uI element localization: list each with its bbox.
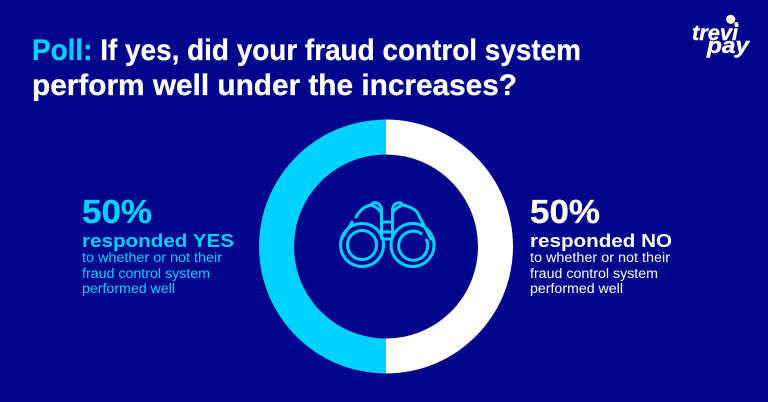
logo wordmark bbox=[692, 22, 751, 58]
logo: TreviPay bbox=[692, 15, 751, 58]
callout: 50% no: to whether or not their bbox=[530, 250, 671, 265]
callout: 50% no: performed well bbox=[530, 281, 623, 296]
title: Poll: If yes, did your fraud control system bbox=[32, 34, 581, 67]
title: perform well under the increases? bbox=[32, 69, 517, 102]
callout: 50% no bbox=[530, 193, 672, 296]
logo wordmark: pay bbox=[706, 33, 751, 58]
donut segment: YES 50% bbox=[259, 120, 386, 374]
callout: 50% yes: responded YES bbox=[82, 230, 234, 251]
logo dots bbox=[726, 15, 738, 26]
callout: 50% no: 50% bbox=[530, 193, 600, 230]
callout: 50% yes: 50% bbox=[82, 193, 152, 230]
donut segment: NO 50% bbox=[386, 120, 513, 374]
icon: binoculars bbox=[340, 203, 434, 266]
logo wordmark: trevi bbox=[692, 22, 739, 45]
callout: 50% yes: to whether or not their bbox=[82, 250, 223, 265]
callout: 50% yes: fraud control system bbox=[82, 266, 210, 281]
title bbox=[32, 34, 581, 102]
callout: 50% no: responded NO bbox=[530, 230, 672, 251]
callout: 50% no: fraud control system bbox=[530, 266, 658, 281]
callout: 50% yes bbox=[82, 193, 234, 296]
callout: 50% yes: performed well bbox=[82, 281, 175, 296]
donut chart bbox=[259, 120, 513, 374]
